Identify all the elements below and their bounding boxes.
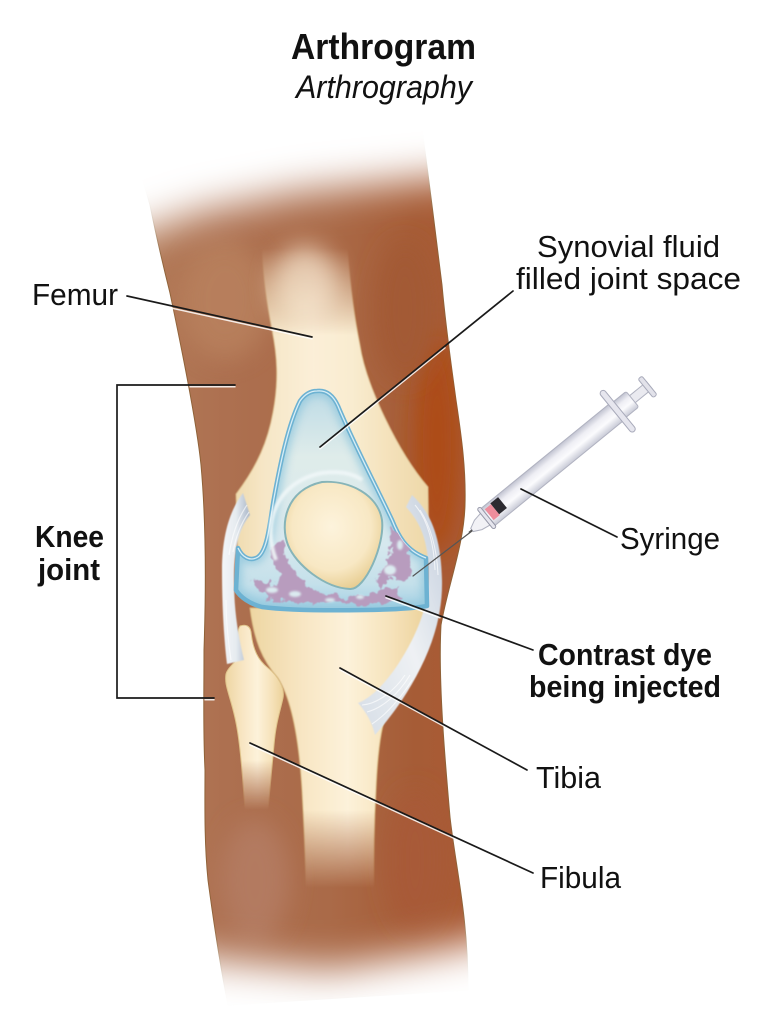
label: synovial fluid: filled joint space bbox=[516, 261, 741, 296]
label: knee joint: Knee bbox=[35, 519, 104, 554]
syringe plunger bbox=[609, 376, 657, 422]
label: femur: Femur bbox=[32, 277, 118, 312]
label: contrast dye: being injected bbox=[529, 669, 721, 704]
label: contrast dye: Contrast dye bbox=[538, 637, 712, 672]
label: syringe: Syringe bbox=[620, 521, 720, 556]
knee joint bracket bbox=[117, 385, 235, 698]
leader: contrast dye bbox=[386, 596, 533, 650]
syringe dye reservoir bbox=[484, 497, 508, 520]
leader: synovial fluid bbox=[320, 291, 513, 447]
leader lines bbox=[117, 291, 617, 873]
joint capsule bbox=[236, 391, 427, 610]
capsule inner glow bbox=[236, 391, 427, 610]
knee illustration bbox=[147, 146, 468, 1000]
label: knee joint bbox=[35, 519, 104, 587]
label: contrast dye bbox=[529, 637, 721, 704]
contrast dye bbox=[250, 525, 412, 604]
label: tibia: Tibia bbox=[536, 760, 602, 795]
title: Arthrogram bbox=[291, 26, 476, 67]
syringe flange bbox=[599, 389, 636, 433]
dye highlights bbox=[266, 540, 403, 602]
capsule highlight bbox=[238, 391, 426, 559]
ligaments bbox=[222, 493, 442, 735]
syringe barrel bbox=[481, 404, 623, 526]
left ligament bbox=[222, 493, 250, 664]
syringe bbox=[452, 365, 666, 553]
needle bbox=[469, 530, 472, 533]
syringe tip bbox=[467, 511, 493, 536]
leader: fibula bbox=[250, 743, 533, 873]
leader: femur bbox=[127, 296, 312, 337]
label: knee joint: joint bbox=[37, 552, 100, 587]
label: synovial fluid bbox=[516, 229, 741, 296]
leg shading bbox=[180, 240, 459, 940]
tibia bbox=[250, 608, 428, 890]
right ligament bbox=[358, 495, 442, 735]
capsule outline bbox=[236, 391, 427, 610]
subtitle: Arthrography bbox=[294, 69, 474, 105]
femur bbox=[236, 240, 429, 562]
leader: tibia bbox=[340, 668, 527, 770]
label: fibula: Fibula bbox=[540, 860, 622, 895]
patella halo bbox=[271, 472, 362, 560]
leader: syringe bbox=[521, 489, 617, 537]
label: synovial fluid: Synovial fluid bbox=[537, 229, 720, 264]
leg bbox=[147, 146, 468, 1000]
fibula bbox=[226, 625, 283, 810]
patella bbox=[285, 482, 382, 589]
needle line bbox=[413, 531, 472, 576]
